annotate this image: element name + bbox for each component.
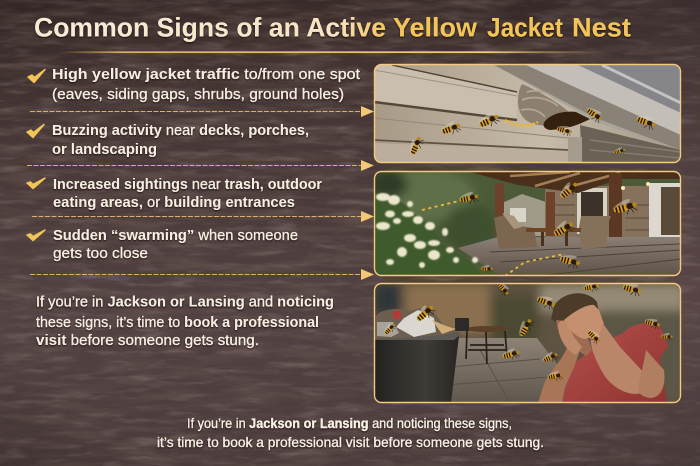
upper arm	[638, 350, 664, 398]
bottom caption: If you’re in Jackson or Lansing and noticing these signs,	[187, 416, 512, 431]
deck floor	[458, 237, 681, 276]
sign 4 text: Sudden “swarming” when someone	[53, 228, 298, 244]
title underline	[58, 51, 608, 53]
right arm	[538, 348, 580, 402]
sign 4: sudden swarming	[27, 228, 298, 262]
blurred cafe background	[375, 284, 680, 339]
face	[556, 320, 592, 356]
call to action paragraph: visit before someone gets stung.	[36, 333, 259, 349]
sign 1: yellow jacket traffic	[28, 67, 360, 103]
call to action paragraph: these signs, it’s time to book a professional	[36, 315, 319, 331]
pergola	[470, 172, 681, 239]
siding boards	[374, 64, 568, 163]
man in red shirt	[538, 293, 668, 403]
call to action paragraph: If you’re in Jackson or Lansing and noticing	[36, 294, 334, 310]
bottom caption: it’s time to book a professional visit before someone gets stung.	[157, 435, 544, 450]
wicker chairs and table	[494, 213, 611, 249]
hands	[558, 320, 582, 355]
blurred garden trees	[375, 172, 495, 248]
icon: check mark 2	[27, 124, 44, 138]
yellow flight trails	[422, 199, 565, 276]
arrow 1 to eaves photo	[30, 106, 374, 117]
sign 2 text: Buzzing activity near decks, porches,	[52, 123, 309, 139]
wasps	[381, 279, 673, 382]
bottom caption	[157, 416, 544, 450]
photo panel: wasps at eaves nest	[374, 64, 681, 163]
sign 4 text	[53, 228, 298, 262]
overflowing garbage	[376, 308, 456, 338]
soffit underside	[580, 125, 681, 163]
flowering bush	[374, 193, 482, 276]
paving	[452, 338, 568, 402]
photo panel: man swarmed near trash can	[374, 279, 685, 403]
sign 2 text	[52, 123, 309, 158]
sign 2 text: or landscaping	[52, 142, 157, 158]
house and siding	[504, 194, 545, 236]
stone wall	[545, 186, 649, 237]
arrow 2 to deck photo	[27, 160, 374, 171]
sign 2: buzzing activity	[27, 123, 309, 158]
icon: check mark 3	[27, 178, 45, 188]
arrow 4	[30, 269, 374, 280]
arrow 3 to trash photo	[32, 211, 374, 222]
photo panel: deck and pergola	[368, 169, 681, 276]
torso	[563, 323, 668, 403]
wasps	[458, 178, 639, 272]
sign 1 text: (eaves, siding gaps, shrubs, ground holes)	[52, 87, 344, 103]
cafe table	[455, 318, 508, 364]
call to action paragraph	[36, 294, 334, 349]
sign 3 text: eating areas, or building entrances	[53, 195, 295, 211]
string lights	[621, 182, 650, 190]
title: Nest	[572, 12, 631, 42]
sign 3 text	[53, 177, 322, 211]
doors	[577, 183, 680, 237]
corner post	[568, 137, 582, 163]
title: Yellow	[393, 12, 478, 42]
sign 3: increased sightings	[27, 177, 322, 211]
sign 4 text: gets too close	[53, 246, 148, 262]
paper nest	[518, 84, 590, 130]
sign 3 text: Increased sightings near trash, outdoor	[53, 177, 322, 193]
trash can	[375, 332, 460, 403]
eave beam	[494, 65, 681, 150]
icon: check mark 1	[28, 70, 45, 82]
hair	[551, 293, 600, 325]
icon: check mark 4	[27, 230, 45, 240]
yellow flight trail	[505, 120, 538, 126]
forearm raised to head	[590, 325, 642, 394]
title: Jacket	[487, 12, 563, 42]
title	[34, 12, 631, 42]
title: Common Signs of an Active	[34, 12, 386, 42]
sign 1 text: High yellow jacket traffic to/from one spot	[52, 67, 360, 83]
wasps	[410, 108, 656, 155]
sign 1 text	[52, 67, 360, 103]
